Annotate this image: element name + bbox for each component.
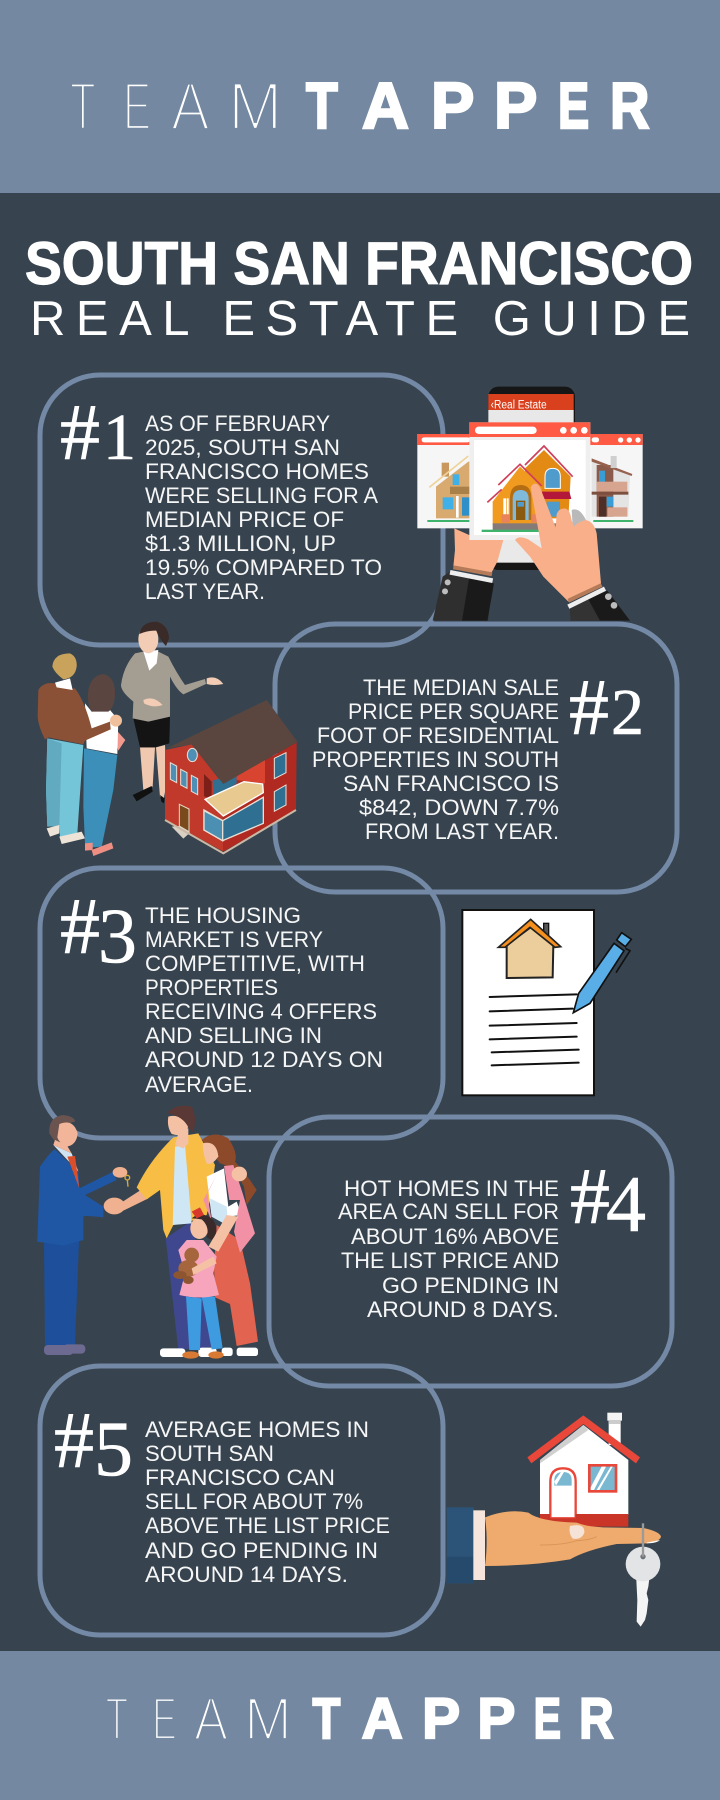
header band bbox=[0, 0, 720, 193]
number #4 bbox=[570, 1153, 646, 1249]
text block 5: ABOVE THE LIST PRICE bbox=[145, 1513, 390, 1538]
text block 5: AVERAGE HOMES IN bbox=[145, 1417, 369, 1442]
panel outline 2 bbox=[275, 624, 677, 892]
illustration: agent handing keys to family bbox=[37, 1106, 258, 1359]
header logo: Team Tapper bbox=[70, 68, 649, 145]
text block 3 bbox=[145, 903, 383, 1097]
text block 3: COMPETITIVE, WITH bbox=[145, 951, 365, 976]
text block 2: THE MEDIAN SALE bbox=[363, 675, 559, 700]
text block 1: 2025, SOUTH SAN bbox=[145, 435, 340, 460]
text block 1: LAST YEAR. bbox=[145, 579, 265, 604]
text block 4: ABOUT 16% ABOVE bbox=[351, 1224, 559, 1249]
number #5: 5 bbox=[94, 1405, 133, 1492]
text block 4: GO PENDING IN bbox=[382, 1273, 559, 1298]
title bbox=[25, 230, 693, 346]
text block 5: SELL FOR ABOUT 7% bbox=[145, 1489, 363, 1514]
illustration: hands holding phone with real estate listings bbox=[417, 387, 643, 621]
illustration: hand holding house with key bbox=[447, 1413, 661, 1627]
text block 2 bbox=[312, 675, 559, 844]
panel outline 3 bbox=[40, 868, 443, 1138]
number #4: 4 bbox=[606, 1161, 646, 1249]
text block 2: FROM LAST YEAR. bbox=[365, 819, 559, 844]
number #3: # bbox=[60, 883, 100, 971]
text block 1: FRANCISCO HOMES bbox=[145, 459, 369, 484]
panel outline 1 bbox=[40, 375, 443, 645]
text block 4: AROUND 8 DAYS. bbox=[367, 1297, 559, 1322]
number #1: # bbox=[60, 389, 100, 477]
text block 5: SOUTH SAN bbox=[145, 1441, 274, 1466]
text block 1: WERE SELLING FOR A bbox=[145, 483, 378, 508]
illustration: document with house and pen bbox=[462, 910, 631, 1095]
text block 3: AROUND 12 DAYS ON bbox=[145, 1047, 383, 1072]
panel outline 5 bbox=[40, 1366, 443, 1635]
text block 5: AROUND 14 DAYS. bbox=[145, 1562, 348, 1587]
footer band bbox=[0, 1651, 720, 1800]
text block 4: THE LIST PRICE AND bbox=[341, 1248, 559, 1273]
text block 3: PROPERTIES bbox=[145, 975, 278, 1000]
text block 1: MEDIAN PRICE OF bbox=[145, 507, 344, 532]
number #4: # bbox=[570, 1153, 610, 1241]
panel outline 4 bbox=[269, 1117, 672, 1386]
number #1: 1 bbox=[103, 401, 136, 474]
text block 4 bbox=[338, 1176, 559, 1322]
text block 3: RECEIVING 4 OFFERS bbox=[145, 999, 377, 1024]
number #2 bbox=[569, 664, 644, 752]
text block 4: HOT HOMES IN THE bbox=[344, 1176, 559, 1201]
number #3: 3 bbox=[98, 892, 137, 979]
text block 2: PRICE PER SQUARE bbox=[348, 699, 559, 724]
text block 2: $842, DOWN 7.7% bbox=[359, 795, 559, 820]
number #3 bbox=[60, 883, 137, 979]
text block 3: THE HOUSING bbox=[145, 903, 301, 928]
text block 2: FOOT OF RESIDENTIAL bbox=[317, 723, 559, 748]
text block 4: AREA CAN SELL FOR bbox=[338, 1199, 559, 1224]
text block 1: $1.3 MILLION, UP bbox=[145, 531, 336, 556]
text block 2: SAN FRANCISCO IS bbox=[343, 771, 559, 796]
number #2: # bbox=[569, 664, 609, 752]
text block 5 bbox=[145, 1417, 390, 1587]
text block 3: AND SELLING IN bbox=[145, 1023, 322, 1048]
text block 5: AND GO PENDING IN bbox=[145, 1538, 378, 1563]
number #5 bbox=[54, 1397, 133, 1492]
text block 1: AS OF FEBRUARY bbox=[145, 411, 330, 436]
text block 5: FRANCISCO CAN bbox=[145, 1465, 335, 1490]
text block 1 bbox=[145, 411, 382, 604]
number #5: # bbox=[54, 1397, 94, 1485]
text block 3: AVERAGE. bbox=[145, 1072, 253, 1097]
illustration: hands holding phone with real estate listings: ‹Real Estate bbox=[491, 398, 547, 412]
title: REAL ESTATE GUIDE bbox=[30, 292, 690, 346]
number #2: 2 bbox=[611, 676, 644, 749]
illustration: agent showing house to couple bbox=[38, 622, 297, 856]
text block 1: 19.5% COMPARED TO bbox=[145, 555, 382, 580]
number #1 bbox=[60, 389, 136, 477]
text block 2: PROPERTIES IN SOUTH bbox=[312, 747, 559, 772]
footer logo: Team Tapper bbox=[106, 1685, 614, 1753]
text block 3: MARKET IS VERY bbox=[145, 927, 323, 952]
